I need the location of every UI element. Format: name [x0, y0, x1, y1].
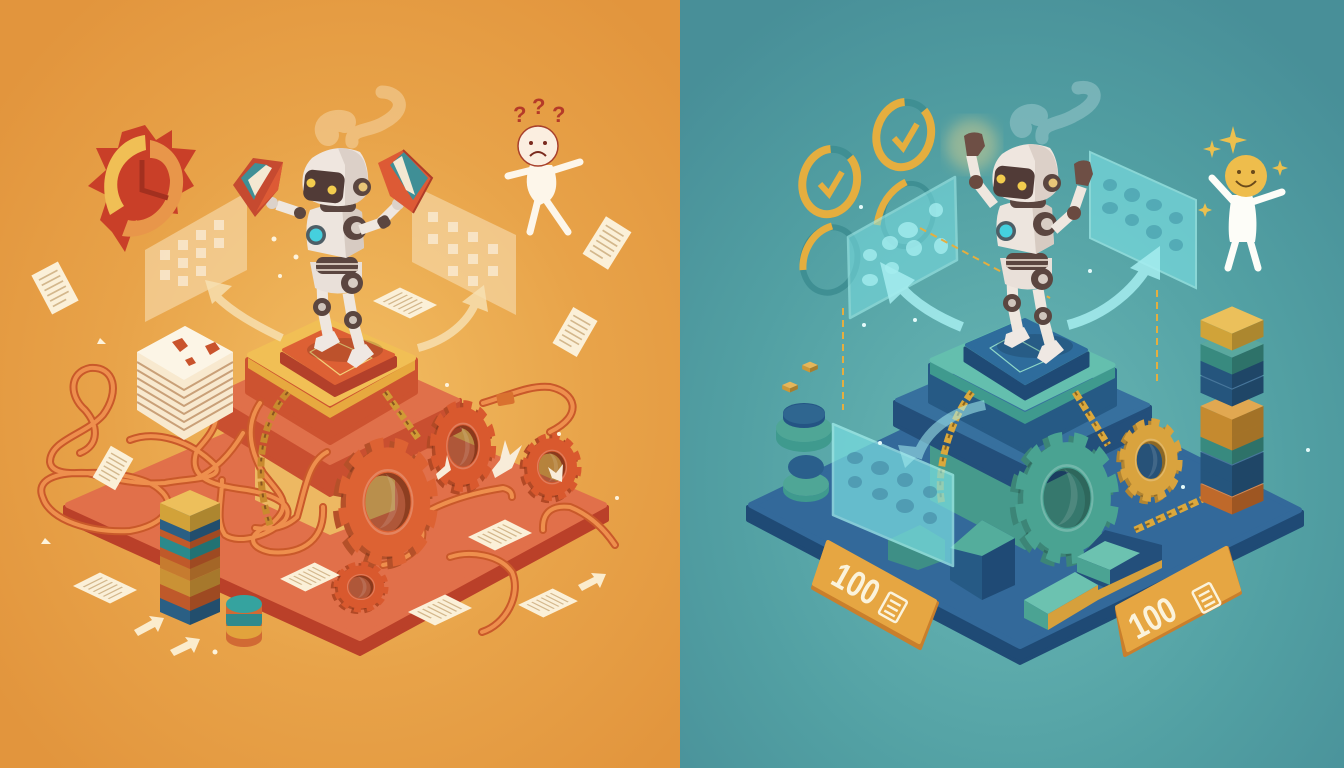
check badge rings [795, 96, 940, 299]
translucent arrow over chain [898, 405, 985, 468]
left background [0, 0, 680, 768]
badge 100 left [813, 542, 937, 648]
teal blocks front [888, 520, 1162, 630]
book right [378, 150, 432, 213]
tube connector [496, 392, 515, 406]
base platform left [65, 388, 607, 654]
book left [233, 158, 283, 217]
question marks: ? [532, 94, 545, 119]
smoke wisp left [326, 92, 399, 142]
base platform right [748, 373, 1302, 663]
cylinders right [776, 403, 832, 502]
robot right arms raised [946, 119, 1093, 364]
arrows right [880, 246, 1160, 327]
translucent panel left b [412, 185, 516, 315]
cyan panel b [1090, 152, 1196, 288]
middle tier left [215, 342, 460, 535]
cyan panel c [833, 424, 953, 566]
translucent panel left a [145, 192, 247, 322]
middle tier right [895, 347, 1150, 492]
scattered papers left [31, 216, 631, 626]
block stack right [1200, 306, 1264, 514]
top tier right [930, 320, 1115, 452]
broken white shards [436, 440, 563, 482]
badge 100 right: 100 [1122, 588, 1183, 647]
gears right [1009, 422, 1180, 569]
lower teal block [930, 440, 1090, 550]
chains left [261, 392, 418, 525]
question marks: ? [513, 102, 526, 127]
panel: organised platform scene [748, 87, 1310, 663]
smoke wisp right [1020, 87, 1094, 138]
block stack left [160, 490, 220, 625]
confused stick figure [508, 94, 580, 232]
robot left with books [233, 148, 432, 368]
small cylinder stack [226, 595, 262, 647]
sparkle dots right [859, 205, 1310, 489]
chains right [940, 392, 1205, 530]
question marks: ? [552, 102, 565, 127]
small arrows left [134, 573, 606, 656]
badge 100 left: 100 [825, 554, 887, 613]
happy stick figure [1198, 126, 1288, 268]
stack of papers [137, 326, 233, 440]
small blocks right [782, 362, 818, 393]
sparkle dots left [41, 236, 619, 654]
gears left [332, 405, 579, 612]
hands raised [964, 132, 1093, 186]
right background [680, 0, 1344, 768]
arrows left [205, 280, 488, 348]
cyan panel a [848, 177, 957, 318]
top tier left [248, 320, 415, 442]
tangled tubes [41, 368, 615, 632]
gold dashed guides [843, 228, 1157, 410]
badge 100 right [1117, 548, 1240, 655]
cracked gear clock icon [88, 125, 196, 252]
panel: chaotic platform scene [31, 92, 631, 656]
